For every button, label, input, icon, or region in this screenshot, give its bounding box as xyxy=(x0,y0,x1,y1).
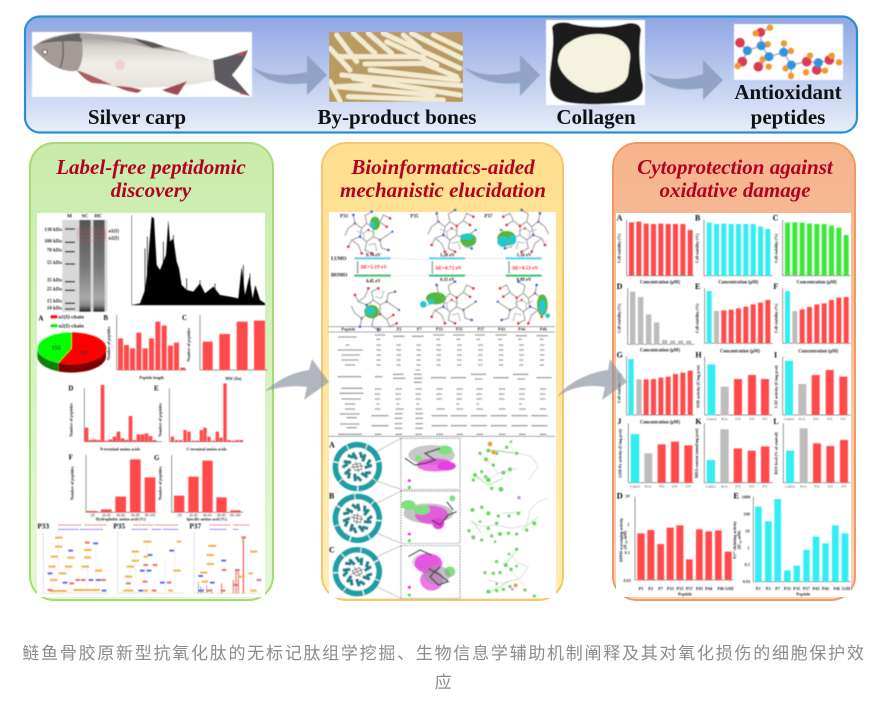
chart J: enzyme activity: GSH-Px activity (U/mg prot) xyxy=(618,428,623,478)
chart E: Fe2+ chelating: 0.01 xyxy=(743,579,750,584)
chart E: Fe2+ chelating: P33 xyxy=(784,586,792,591)
chart L: ROS level: P37 xyxy=(841,485,847,489)
heading: label-free peptidomic discovery: discovery xyxy=(111,178,192,202)
frontier orbital diagram: P37 xyxy=(484,215,493,220)
chart E: Fe2+ chelating: P44 xyxy=(822,586,830,591)
label: antioxidant peptides: peptides xyxy=(751,105,825,129)
bar chart E: C-terminal amino acids: E xyxy=(154,385,159,393)
SDS-PAGE gel: 25 kDa xyxy=(47,288,62,293)
chart H: enzyme activity: P37 xyxy=(762,417,768,421)
chart D: DPPH scavenging: P33 xyxy=(667,586,675,591)
chart E: peptide protection: E xyxy=(695,282,700,291)
chart D: DPPH scavenging: (IC₅₀, mM) xyxy=(623,530,628,549)
SDS-PAGE gel: α2(I) xyxy=(108,237,119,242)
chart I: enzyme activity: P37 xyxy=(841,417,846,421)
caption: 鲢鱼骨胶原新型抗氧化肽的无标记肽组学挖掘、生物信息学辅助机制阐释及其对氧化损伤的细胞保护效 xyxy=(22,644,866,663)
bar chart E: C-terminal amino acids xyxy=(154,383,243,452)
chart K: MDA content xyxy=(694,417,773,489)
SDS-PAGE gel: 55 kDa xyxy=(47,261,62,266)
bar chart F: hydrophobic amino acid: Number of peptides xyxy=(69,466,74,500)
bar chart C: molecular weight: C xyxy=(182,314,187,322)
MS/MS spectrum P35: P35 xyxy=(113,522,125,531)
SDS-PAGE gel: α1(I) xyxy=(108,230,119,235)
chart D: DPPH scavenging: Peptide xyxy=(678,592,692,597)
chart B: cell viability: Cell viability (%) xyxy=(695,233,700,263)
arrow: collagen to peptides xyxy=(647,60,723,100)
chart E: Fe2+ chelating: P37 xyxy=(803,586,811,591)
chart D: DPPH scavenging: GSH xyxy=(725,586,734,591)
SDS-PAGE gel: M xyxy=(67,214,72,220)
chart K: MDA content: MDA content (nmol/mg prot) xyxy=(694,428,699,478)
chart D: DPPH scavenging: 0.1 xyxy=(625,550,630,555)
chart I: enzyme activity: CAT activity (U/mg prot) xyxy=(774,365,779,408)
chart E: Fe2+ chelating: 1 xyxy=(747,545,749,550)
pie chart: alpha chains: A xyxy=(38,315,43,323)
caption: 应 xyxy=(435,673,453,692)
frontier orbital diagram: ΔE=5.19 eV xyxy=(360,265,387,271)
chart D: DPPH scavenging: P2 xyxy=(648,586,653,591)
chart A: cell viability: A xyxy=(617,213,623,222)
table: peptide properties: P46 xyxy=(540,327,548,332)
chart H: enzyme activity xyxy=(695,351,773,421)
chart J: enzyme activity: P33 xyxy=(659,485,665,489)
chart I: enzyme activity xyxy=(774,351,851,421)
chart H: enzyme activity: P35 xyxy=(749,417,755,421)
bar chart G: specific amino acid: <20 xyxy=(176,514,182,518)
chart L: ROS level: ROS level (% of control) xyxy=(773,432,778,474)
SDS-PAGE gel: HC xyxy=(94,214,102,220)
chart E: Fe2+ chelating: GSH xyxy=(842,586,851,591)
frontier orbital diagram: P35 xyxy=(410,215,419,220)
chart E: Fe2+ chelating: 0.1 xyxy=(745,562,750,567)
bar chart G: specific amino acid xyxy=(154,454,243,522)
chart B: cell viability: Concentration (μM) xyxy=(718,280,759,285)
chart E: Fe2+ chelating: 1000 xyxy=(742,494,750,499)
frontier orbital diagram: ΔE=4.72 eV xyxy=(435,265,462,271)
table: peptide properties: Peptide xyxy=(341,327,355,332)
chart D: H2O2 dose response: Concentration (μM) xyxy=(640,349,680,354)
chart B: cell viability xyxy=(695,213,773,285)
table: peptide properties: P7 xyxy=(417,327,423,332)
bar chart F: hydrophobic amino acid: F xyxy=(69,453,73,461)
chart E: Fe2+ chelating: (IC₅₀, mM) xyxy=(737,530,742,549)
chart L: ROS level: Control xyxy=(785,485,795,489)
bar chart G: specific amino acid: 20-40 xyxy=(189,514,198,518)
SDS-PAGE gel: 15 kDa xyxy=(47,300,62,305)
chart K: MDA content: H₂O₂ xyxy=(721,485,728,489)
chart J: enzyme activity: H₂O₂ xyxy=(645,485,652,489)
chart J: enzyme activity: P37 xyxy=(686,485,691,489)
bar chart B: peptide length: Number of peptides xyxy=(106,326,111,360)
chart A: cell viability: Cell viability (%) xyxy=(617,233,622,263)
table: peptide properties: P2 xyxy=(397,327,401,332)
chart J: enzyme activity: Control xyxy=(630,485,640,489)
chart J: enzyme activity xyxy=(617,417,694,489)
chart D: DPPH scavenging: P44 xyxy=(705,586,713,591)
bar chart F: hydrophobic amino acid: 60-80 xyxy=(131,514,140,518)
bar chart G: specific amino acid: Specific amino acid (%) xyxy=(186,517,228,522)
chart E: Fe2+ chelating: P46 xyxy=(833,586,840,591)
chart E: Fe2+ chelating xyxy=(732,490,851,597)
frontier orbital diagram xyxy=(331,209,550,331)
chart K: MDA content: K xyxy=(695,417,702,426)
chart L: ROS level: H₂O₂ xyxy=(800,485,807,489)
chart D: DPPH scavenging: P7 xyxy=(658,586,664,591)
chart E: Fe2+ chelating: 10 xyxy=(745,528,749,533)
chart E: peptide protection: Cell viability (%) xyxy=(695,303,700,333)
chart F: peptide protection: Cell viability (%) xyxy=(773,303,778,333)
frontier orbital diagram: 1.20 eV xyxy=(440,254,455,259)
chart A: cell viability: Concentration (μM) xyxy=(640,280,680,285)
bar chart B: peptide length xyxy=(103,314,187,380)
chart D: H2O2 dose response: D xyxy=(617,282,623,291)
chart D: DPPH scavenging: DPPH scavenging activity xyxy=(618,518,623,562)
panel: label-free peptidomic discovery xyxy=(30,143,273,600)
left panel figures xyxy=(37,214,267,593)
chart H: enzyme activity: H₂O₂ xyxy=(721,417,728,421)
bar chart F: hydrophobic amino acid: <20 xyxy=(89,514,95,518)
chart L: ROS level: P35 xyxy=(828,485,833,489)
chart E: Fe2+ chelating: P43 xyxy=(813,586,820,591)
bar chart F: hydrophobic amino acid: 20-40 xyxy=(102,514,111,518)
bar chart D: N-terminal amino acids: N-terminal amino acids xyxy=(100,447,140,452)
bar chart G: specific amino acid: 60-80 xyxy=(217,514,226,518)
bar chart G: specific amino acid: 40-60 xyxy=(203,514,212,518)
chart E: peptide protection xyxy=(695,282,773,355)
chart E: peptide protection: Concentration (μM) xyxy=(720,350,760,355)
label: antioxidant peptides: Antioxidant xyxy=(734,80,842,104)
chart I: enzyme activity: P33 xyxy=(813,417,819,421)
chart D: DPPH scavenging: P46 xyxy=(717,586,724,591)
chart G: peptide protection: Concentration (μM) xyxy=(640,420,680,425)
chart E: Fe2+ chelating: 100 xyxy=(743,511,750,516)
frontier orbital diagram: P33 xyxy=(340,215,349,220)
bar chart B: peptide length: Peptide length xyxy=(139,375,165,380)
bar chart D: N-terminal amino acids: D xyxy=(68,385,73,393)
frontier orbital diagram: 6.09 eV xyxy=(517,278,532,283)
table: peptide properties: P1 xyxy=(377,327,381,332)
MS/MS spectrum P35 xyxy=(113,522,184,593)
label: by-product bones: By-product bones xyxy=(318,105,476,129)
mass spectrum chromatogram xyxy=(132,215,265,305)
chart D: DPPH scavenging: 10 xyxy=(625,494,629,499)
chart K: MDA content: P37 xyxy=(762,485,768,489)
chart D: DPPH scavenging: P37 xyxy=(686,586,694,591)
chart G: peptide protection: G xyxy=(617,351,623,360)
heading: cytoprotection against oxidative damage: oxidative damage xyxy=(659,178,811,202)
frontier orbital diagram: LUMO xyxy=(331,257,347,262)
frontier orbital diagram: 0.74 eV xyxy=(366,254,381,259)
chart G: peptide protection: Cell viability (%) xyxy=(617,373,622,403)
MS/MS spectrum P33 xyxy=(37,522,108,593)
bar chart F: hydrophobic amino acid: Hydrophobic amino acid (%) xyxy=(96,517,146,522)
arrow: carp to bones xyxy=(252,55,327,95)
chart C: cell viability: Cell viability (%) xyxy=(773,233,778,263)
top panel: raw material workflow xyxy=(25,16,857,132)
bar chart F: hydrophobic amino acid xyxy=(69,453,157,522)
chart E: Fe2+ chelating: Peptide xyxy=(796,592,810,597)
label: silver carp: Silver carp xyxy=(88,105,186,129)
icon: by-product bones photo xyxy=(329,32,463,102)
chart I: enzyme activity: Control xyxy=(784,417,794,421)
right panel figures xyxy=(617,213,851,597)
icon: antioxidant peptide molecules xyxy=(734,24,843,80)
table: peptide properties: P43 xyxy=(498,327,506,332)
heading: bioinformatics-aided mechanistic elucidation: mechanistic elucidation xyxy=(340,178,546,202)
bar chart B: peptide length: B xyxy=(103,314,108,322)
chart F: peptide protection: F xyxy=(773,282,778,291)
table: peptide properties xyxy=(328,327,555,436)
arrow: elucidation to cytoprotection xyxy=(557,359,627,400)
bar chart G: specific amino acid: 80-100 xyxy=(230,514,241,518)
chart C: cell viability xyxy=(773,213,851,285)
chart H: enzyme activity: SOD activity (U/mg prot) xyxy=(695,365,700,408)
arrow: bones to collagen xyxy=(464,55,540,96)
SDS-PAGE gel: 130 kDa xyxy=(44,228,63,233)
molecular docking row A xyxy=(329,438,538,492)
table: peptide properties: P33 xyxy=(436,327,444,332)
MS/MS spectrum P37 xyxy=(189,522,262,593)
chart E: Fe2+ chelating: P2 xyxy=(766,586,771,591)
chart B: cell viability: B xyxy=(695,213,701,222)
bar chart C: molecular weight: MW (Da) xyxy=(225,376,242,381)
chart G: peptide protection xyxy=(617,351,694,425)
SDS-PAGE gel: 100 kDa xyxy=(44,239,63,244)
frontier orbital diagram: 1.56 eV xyxy=(517,254,532,259)
chart D: DPPH scavenging: 1 xyxy=(627,522,629,527)
molecular docking row B xyxy=(327,488,547,549)
chart J: enzyme activity: J xyxy=(617,417,621,426)
chart E: Fe2+ chelating: P7 xyxy=(775,586,781,591)
molecular docking row A: A xyxy=(329,441,335,450)
panel: cytoprotection against oxidative damage xyxy=(613,143,855,600)
bar chart G: specific amino acid: Number of peptides xyxy=(158,466,163,500)
bar chart D: N-terminal amino acids xyxy=(68,385,162,452)
chart D: H2O2 dose response: Cell viability (%) xyxy=(617,303,622,333)
chart L: ROS level xyxy=(773,417,851,489)
chart K: MDA content: Control xyxy=(706,485,716,489)
chart E: Fe2+ chelating: P35 xyxy=(793,586,800,591)
frontier orbital diagram: 4.45 eV xyxy=(366,280,381,285)
bar chart F: hydrophobic amino acid: 80-100 xyxy=(145,514,155,518)
label: collagen: Collagen xyxy=(556,105,636,129)
SDS-PAGE gel: 10 kDa xyxy=(47,306,62,311)
panel: bioinformatics-aided mechanistic elucidation xyxy=(322,143,563,601)
heading: label-free peptidomic discovery: Label-free peptidomic xyxy=(55,155,246,179)
bar chart F: hydrophobic amino acid: 40-60 xyxy=(116,514,125,518)
SDS-PAGE gel: 70 kDa xyxy=(47,249,62,254)
table: peptide properties: P35 xyxy=(456,327,463,332)
chart D: DPPH scavenging: P1 xyxy=(639,586,643,591)
pie chart: alpha chains xyxy=(37,314,106,373)
chart D: DPPH scavenging xyxy=(617,490,734,597)
molecular docking row B: B xyxy=(329,492,335,501)
chart C: cell viability: Concentration (μM) xyxy=(797,280,837,285)
chart J: enzyme activity: P35 xyxy=(672,485,678,489)
molecular docking row C xyxy=(328,542,536,601)
frontier orbital diagram: 6.11 eV xyxy=(440,278,455,283)
chart F: peptide protection: Concentration (μM) xyxy=(798,350,839,355)
chart E: Fe2+ chelating: Fe²⁺ chelating activity xyxy=(732,521,737,559)
bar chart E: C-terminal amino acids: Number of peptides xyxy=(158,403,163,437)
pie chart: alpha chains: 152 xyxy=(52,346,60,352)
pie chart: alpha chains: α2(I)-chain xyxy=(58,323,84,330)
icon: collagen powder on black dish xyxy=(546,20,645,105)
chart D: DPPH scavenging: D xyxy=(617,490,623,500)
chart K: MDA content: P33 xyxy=(735,485,741,489)
SDS-PAGE gel: SC xyxy=(82,214,89,220)
MS/MS spectrum P33: P33 xyxy=(37,522,49,531)
heading: cytoprotection against oxidative damage: Cytoprotection against xyxy=(637,155,834,179)
bar chart D: N-terminal amino acids: Number of peptides xyxy=(69,403,74,437)
chart I: enzyme activity: H₂O₂ xyxy=(799,417,806,421)
SDS-PAGE gel xyxy=(44,214,119,312)
chart A: cell viability xyxy=(617,213,694,285)
bar chart C: molecular weight xyxy=(182,314,267,381)
chart I: enzyme activity: P35 xyxy=(827,417,833,421)
chart D: H2O2 dose response xyxy=(617,282,694,354)
chart F: peptide protection xyxy=(773,282,851,355)
chart C: cell viability: C xyxy=(773,213,779,222)
caption xyxy=(22,644,866,692)
middle panel figures xyxy=(327,209,555,601)
chart L: ROS level: P33 xyxy=(814,485,820,489)
chart D: DPPH scavenging: 0.01 xyxy=(624,578,631,583)
molecular docking row C: C xyxy=(329,546,335,555)
chart L: ROS level: L xyxy=(773,417,779,426)
arrow: discovery to elucidation xyxy=(265,359,329,400)
chart K: MDA content: P35 xyxy=(749,485,755,489)
bar chart G: specific amino acid: G xyxy=(154,454,160,462)
chart H: enzyme activity: Control xyxy=(706,417,716,421)
table: peptide properties: P44 xyxy=(518,327,526,332)
chart I: enzyme activity: I xyxy=(774,351,777,360)
bar chart E: C-terminal amino acids: C-terminal amino acids xyxy=(187,447,227,452)
icon: silver carp photo xyxy=(32,32,252,97)
chart D: DPPH scavenging: P35 xyxy=(677,586,683,591)
table: peptide properties: P37 xyxy=(478,327,485,332)
chart H: enzyme activity: P33 xyxy=(735,417,741,421)
pie chart: alpha chains: 197 xyxy=(80,351,88,357)
frontier orbital diagram: ΔE=4.53 eV xyxy=(512,265,539,271)
bar chart C: molecular weight: Number of peptides xyxy=(186,328,191,362)
heading: bioinformatics-aided mechanistic elucidation: Bioinformatics-aided xyxy=(350,155,535,179)
SDS-PAGE gel: 35 kDa xyxy=(47,279,62,284)
chart H: enzyme activity: H xyxy=(695,351,702,360)
chart E: Fe2+ chelating: P1 xyxy=(756,586,761,591)
MS/MS spectrum P37: P37 xyxy=(189,522,201,531)
chart D: DPPH scavenging: P43 xyxy=(696,586,704,591)
chart E: Fe2+ chelating: E xyxy=(733,490,739,500)
pie chart: alpha chains: α1(I)-chain xyxy=(58,314,84,321)
frontier orbital diagram: HOMO xyxy=(331,274,347,279)
